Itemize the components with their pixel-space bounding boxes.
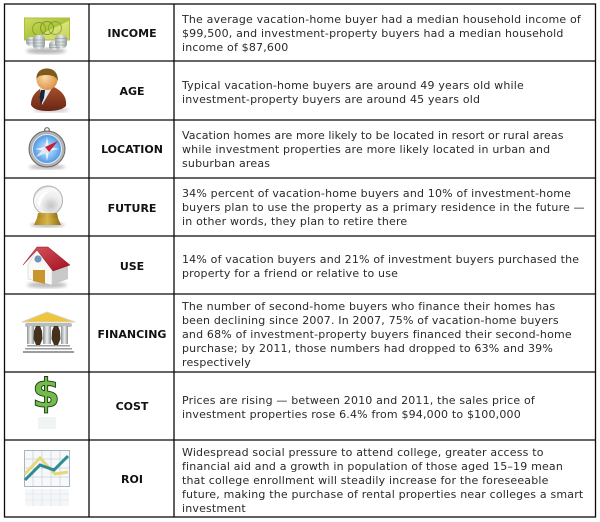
text: income: The average vacation-home buyer had a median household income of xyxy=(181,13,582,26)
text: location: while investment properties are more likely located in urban and xyxy=(182,143,550,156)
text: use: 14% of vacation buyers and 21% of investment buyers purchased the xyxy=(182,253,579,266)
text: income: income of $87,600 xyxy=(182,41,288,54)
icon: crystal ball xyxy=(30,186,64,228)
text: financing: The number of second-home buyers who finance their homes has xyxy=(181,300,555,313)
row: location xyxy=(29,128,564,170)
text: roi: investment xyxy=(182,502,246,515)
label: financing: FINANCING xyxy=(98,328,166,341)
icon: dollar sign: $ xyxy=(32,371,60,417)
text: income: $99,500, and investment-property buyers had a median household xyxy=(182,27,564,40)
row: age xyxy=(31,68,524,112)
icon: bank building xyxy=(22,312,75,353)
row: financing xyxy=(22,300,572,369)
row: future xyxy=(30,186,585,228)
text: use: property for a friend or relative to use xyxy=(182,267,398,280)
row: cost xyxy=(32,371,536,429)
label: income: INCOME xyxy=(107,27,157,40)
text: cost: Prices are rising — between 2010 and 2011, the sales price of xyxy=(182,394,536,407)
text: financing: and 68% of investment-property buyers financed their second-home xyxy=(182,328,572,341)
text: roi: Widespread social pressure to attend college, greater access to xyxy=(182,446,544,459)
row: income xyxy=(24,13,582,54)
text: location: Vacation homes are more likely to be located in resort or rural areas xyxy=(182,129,564,142)
text: roi: that college enrollment will steadily increase for the foreseeable xyxy=(182,474,549,487)
text: roi: future, making the purchase of rental properties near colleges a smart xyxy=(182,488,584,501)
label: cost: COST xyxy=(116,400,149,413)
text: location: suburban areas xyxy=(182,157,270,170)
label: use: USE xyxy=(120,260,144,273)
text: financing: purchase; by 2011, those numbers had dropped to 63% and 39% xyxy=(182,342,553,355)
label: age: AGE xyxy=(119,85,145,98)
text: future: 34% percent of vacation-home buyers and 10% of investment-home xyxy=(182,187,571,200)
text: roi: financial aid and a growth in population of those aged 15–19 mean xyxy=(182,460,563,473)
label: roi: ROI xyxy=(121,473,143,486)
icon: banknote and coins xyxy=(24,18,70,54)
text: age: investment-property buyers are around 45 years old xyxy=(182,93,480,106)
icon: house xyxy=(23,247,70,288)
text: age: Typical vacation-home buyers are around 49 years old while xyxy=(181,79,524,92)
row: use xyxy=(23,247,579,288)
text: future: buyers plan to use the property as a primary residence in the future — xyxy=(182,201,585,214)
text: cost: investment properties rose 6.4% from $94,000 to $100,000 xyxy=(182,408,521,421)
text: future: in other words, they plan to retire there xyxy=(182,215,407,228)
text: financing: been declining since 2007. In 2007, 75% of vacation-home buyers xyxy=(182,314,559,327)
icon: compass xyxy=(29,128,65,170)
row: roi xyxy=(24,446,584,515)
label: future: FUTURE xyxy=(108,202,156,215)
text: financing: respectively xyxy=(182,356,251,369)
icon: businessman xyxy=(31,68,69,112)
label: location: LOCATION xyxy=(101,143,163,156)
icon: line chart xyxy=(24,450,70,506)
